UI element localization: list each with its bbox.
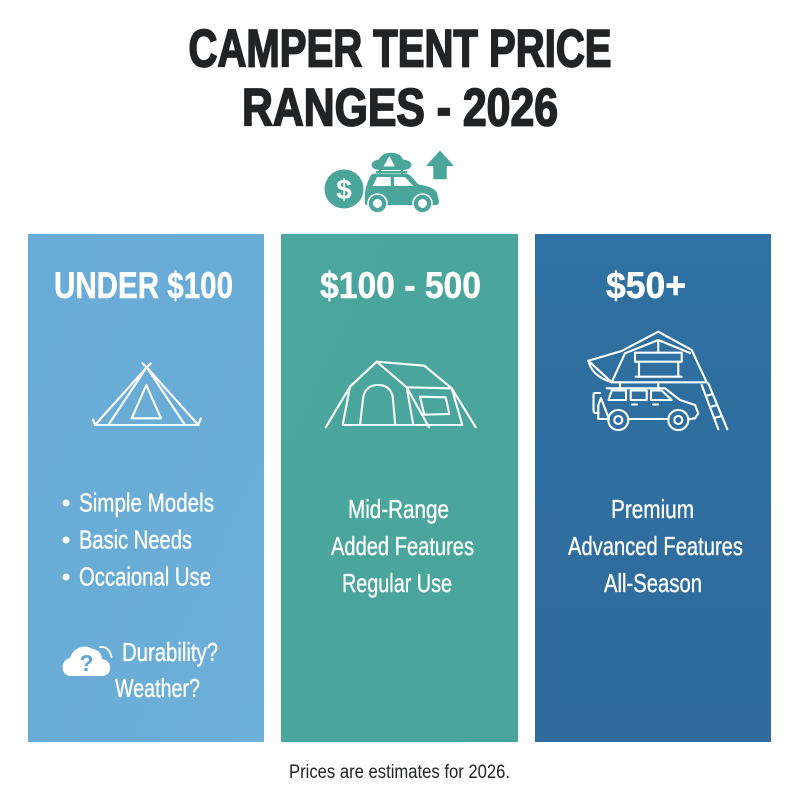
question text: [115, 637, 218, 703]
question text: Durability?: [122, 637, 218, 667]
title: RANGES - 2026: [242, 78, 558, 138]
icon: roof cargo: [372, 153, 412, 175]
icon: rooftop tent on SUV: [588, 332, 727, 430]
features text: All-Season: [604, 568, 702, 598]
icon: simple tent: [93, 364, 201, 425]
icon: dollar coin, car with roof cargo and up arrow: [324, 150, 454, 213]
features text: Advanced Features: [568, 531, 743, 561]
heading: $100 - 500: $100 - 500: [320, 265, 481, 306]
panel: under $100: [28, 234, 264, 742]
bullet list: [62, 488, 214, 592]
bullet list: Occaional Use: [79, 562, 211, 592]
heading: $50+: $50+: [606, 265, 686, 306]
bullet list: Simple Models: [79, 488, 214, 518]
bullet list: Basic Needs: [79, 524, 192, 554]
icon: cloud with question mark: ?: [79, 650, 94, 676]
title: [188, 20, 612, 138]
features text: Mid-Range: [348, 494, 449, 524]
panel: $50+: [535, 234, 771, 742]
features text: Added Features: [331, 531, 474, 561]
features text: Regular Use: [342, 568, 452, 598]
footer note: Prices are estimates for 2026.: [289, 762, 510, 783]
icon: cabin tent: [326, 362, 476, 427]
title: CAMPER TENT PRICE: [188, 20, 612, 78]
icon: up arrow: [426, 150, 454, 179]
features text: Premium: [611, 494, 694, 524]
features text: [331, 494, 474, 598]
icon: dollar coin: $: [336, 174, 352, 205]
heading: under $100: UNDER $100: [54, 265, 233, 306]
panel: $100 - 500: [281, 234, 518, 742]
question text: Weather?: [115, 673, 200, 703]
icon: cloud with question mark: [63, 647, 112, 676]
icon: car: [365, 174, 439, 213]
features text: [568, 494, 743, 598]
